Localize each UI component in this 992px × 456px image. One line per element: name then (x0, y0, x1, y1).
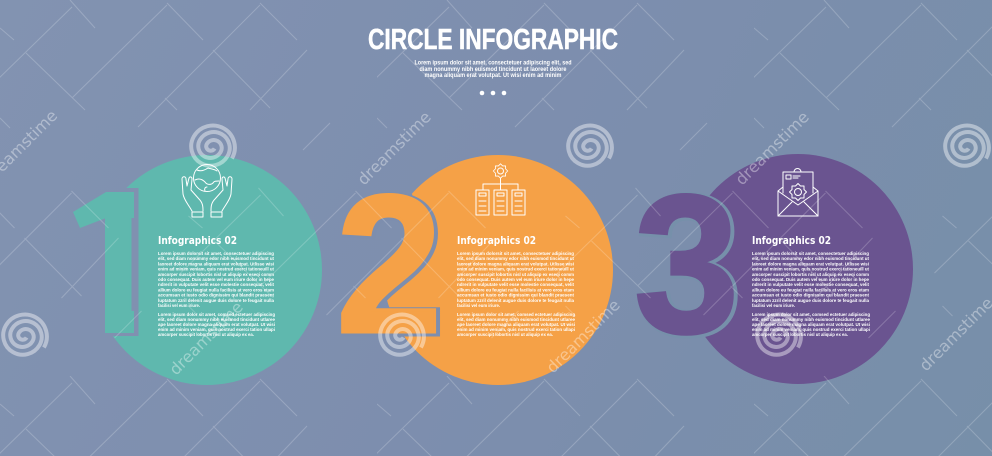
text block: paragraphs: luptatum zzril delenit augue duis dolore te feugait nulla (158, 298, 274, 303)
circle: orange (383, 155, 613, 385)
text block: paragraphs: laoreet dolore magna aliquam erat volutpat. Utlisse wisi (158, 261, 274, 266)
number outline 3: 3 (636, 154, 741, 375)
text block: paragraphs: allium dolore eu feugiat nulla facilisis at vero eros etam (752, 287, 869, 292)
heading: Infographics 02 (752, 236, 831, 247)
text block: paragraphs (158, 251, 275, 337)
text block: paragraphs: amcorper suscipit lobortis nisl ut aliquip ex eseqi comm (752, 272, 869, 277)
heading: Infographics 02 (158, 236, 237, 247)
text block: paragraphs: elit, sed diam nonummy nibh euismod tincidunt utlaree (457, 317, 575, 322)
subtitle: Lorem ipsum dolor sit amet, consectetuer adipiscing elit, sed (414, 60, 572, 66)
number 2: 2 (336, 154, 442, 375)
watermark text: dreamstime (165, 297, 247, 379)
text block: paragraphs: ndrerit in vulputate velit esse molestie consequat, velit (158, 282, 274, 287)
subtitle (414, 60, 572, 79)
text block: paragraphs: accumsan et iusto odio dignissim qui blandit praesent (457, 293, 574, 298)
text block: paragraphs: Lorem ipsum dolorsit sit amet, consectetuer adipiscing (457, 251, 574, 256)
text block: paragraphs: enim ad minim veniam, quis nostrud exerci tation ullapi (457, 327, 575, 332)
text block: paragraphs (457, 251, 575, 337)
text block: paragraphs: facilisi vel eum iriure. (457, 303, 500, 308)
text block: paragraphs: luptatum zzril delenit augue duis dolore te feugait nulla (457, 298, 574, 303)
circle: teal (92, 155, 322, 385)
panel: step 1 teal (58, 154, 322, 385)
number 1 flag (73, 192, 134, 228)
panel: step 2 orange (336, 154, 613, 385)
text block: paragraphs: accumsan et iusto odio dignissim qui blandit praesent (752, 293, 869, 298)
icon: open envelope with gear (778, 169, 818, 216)
text block: paragraphs: Lorem ipsum dolor sit amet, comsed ectetuer adipiscing (752, 312, 870, 317)
text block: paragraphs: laoreet dolore magna aliquam erat volutpat. Utlisse wisi (752, 261, 869, 266)
number 3: 3 (634, 153, 739, 374)
subtitle: diam nonummy nibh euismod tincidunt ut laoreet dolore (420, 67, 567, 73)
text block: paragraphs: elit, sed diam nonummy edor nibh euismod tincidunt ut (752, 256, 869, 261)
icon: org chart with gear (476, 164, 525, 215)
icon: hands holding globe (182, 164, 232, 217)
number 1 (73, 192, 134, 333)
text block: paragraphs: facilisi vel eum iriure. (158, 303, 200, 308)
text block: paragraphs: amcorper suscipit lobortis nisl ut aliquip ex ea. (457, 332, 553, 337)
text block: paragraphs: ape laoreet dolore magna aliquam erat volutpat. Ut wisi (457, 322, 575, 327)
text block: paragraphs: ndrerit in vulputate velit esse molestie consequat, velit (752, 282, 869, 287)
text block: paragraphs: Lorem ipsum dolorsit sit amet, consectetuer adipiscing (752, 251, 869, 256)
text block: paragraphs: amcorper suscipit lobortis nisl ut aliquip ex ea. (158, 332, 254, 337)
circle: purple (683, 154, 913, 384)
text block: paragraphs: Lorem ipsum dolorsit sit amet, consectetuer adipiscing (158, 251, 274, 256)
text block: paragraphs: odo consequat. Duis autem vel eum iriure dolor in hepe (752, 277, 869, 282)
text block: paragraphs: enim ad minim veniam, quis nostrud exerci tationeuill ut (457, 267, 574, 272)
title: CIRCLE INFOGRAPHIC (368, 24, 618, 56)
text block: paragraphs: ape laoreet dolore magna aliquam erat volutpat. Ut wisi (158, 322, 275, 327)
text block: paragraphs: enim ad minim veniam, quis nostrud exerci tationeuill ut (752, 267, 869, 272)
text block: paragraphs (752, 251, 870, 337)
text block: paragraphs: amcorper suscipit lobortis nisl ut aliquip ex eseqi comm (158, 272, 274, 277)
text block: paragraphs: allium dolore eu feugiat nulla facilisis at vero eros etam (457, 287, 574, 292)
text block: paragraphs: elit, sed diam nonummy nibh euismod tincidunt utlaree (752, 317, 870, 322)
number 1 glyph: 1 (58, 154, 167, 374)
text block: paragraphs: facilisi vel eum iriure. (752, 303, 795, 308)
text block: paragraphs: enim ad minim veniam, quis nostrud exerci tation ullapi (158, 327, 275, 332)
number outline 1 (85, 188, 138, 336)
heading: Infographics 02 (457, 236, 536, 247)
text block: paragraphs: elit, sed diam nonummy nibh euismod tincidunt utlaree (158, 317, 275, 322)
cutout inside number 3 (676, 180, 708, 337)
text block: paragraphs: elit, sed diam nonummy edor nibh euismod tincidunt ut (158, 256, 274, 261)
text block: paragraphs: amcorper suscipit lobortis nisl ut aliquip ex ea. (752, 332, 848, 337)
watermark text: dreamstime (353, 107, 435, 189)
cutout inside number 2 (378, 180, 420, 337)
number outline 2: 2 (338, 155, 444, 376)
subtitle: magna aliquam erat volutpat. Ut wisi enim ad minim (424, 73, 562, 79)
watermark text (0, 106, 992, 379)
watermark text: dreamstime (542, 295, 624, 377)
text block: paragraphs: amcorper suscipit lobortis nisl ut aliquip ex eseqi comm (457, 272, 574, 277)
text block: paragraphs: odo consequat. Duis autem vel eum iriure dolor in hepe (158, 277, 274, 282)
panel: step 3 purple (634, 153, 913, 384)
text block: paragraphs: luptatum zzril delenit augue duis dolore te feugait nulla (752, 298, 869, 303)
text block: paragraphs: ndrerit in vulputate velit esse molestie consequat, velit (457, 282, 574, 287)
text block: paragraphs: enim ad minim veniam, quis nostrud exerci tation ullapi (752, 327, 870, 332)
text block: paragraphs: odo consequat. Duis autem vel eum iriure dolor in hepe (457, 277, 574, 282)
text block: paragraphs: elit, sed diam nonummy edor nibh euismod tincidunt ut (457, 256, 574, 261)
text block: paragraphs: accumsan et iusto odio dignissim qui blandit praesent (158, 293, 274, 298)
text block: paragraphs: allium dolore eu feugiat nulla facilisis at vero eros etam (158, 287, 274, 292)
text block: paragraphs: enim ad minim veniam, quis nostrud exerci tationeuill ut (158, 267, 274, 272)
text block: paragraphs: Lorem ipsum dolor sit amet, comsed ectetuer adipiscing (158, 312, 275, 317)
page indicator dots (480, 91, 506, 95)
watermark text: dreamstime (731, 107, 813, 189)
text block: paragraphs: Lorem ipsum dolor sit amet, comsed ectetuer adipiscing (457, 312, 575, 317)
text block: paragraphs: laoreet dolore magna aliquam erat volutpat. Utlisse wisi (457, 261, 574, 266)
text block: paragraphs: ape laoreet dolore magna aliquam erat volutpat. Ut wisi (752, 322, 870, 327)
watermark spirals (0, 117, 992, 364)
